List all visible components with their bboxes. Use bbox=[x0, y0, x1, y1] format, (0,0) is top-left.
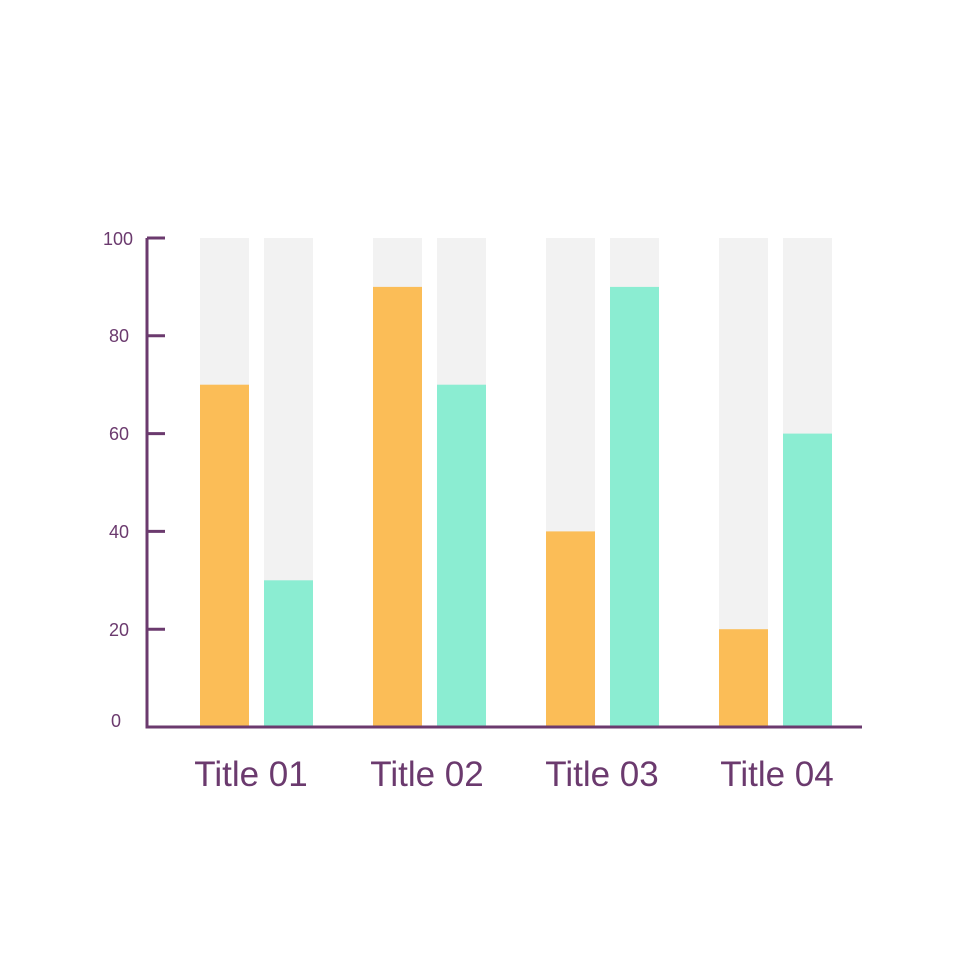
teal bars bbox=[264, 287, 832, 727]
y-axis labels: 100 bbox=[103, 229, 133, 249]
orange bars bbox=[200, 287, 768, 727]
y-axis labels: 0 bbox=[111, 711, 121, 731]
x-axis labels bbox=[194, 755, 834, 794]
x-axis labels: Title 02 bbox=[370, 755, 484, 794]
y-axis labels: 40 bbox=[109, 522, 129, 542]
x-axis labels: Title 01 bbox=[194, 755, 308, 794]
y-axis labels: 20 bbox=[109, 620, 129, 640]
y-axis labels: 60 bbox=[109, 424, 129, 444]
x-axis labels: Title 04 bbox=[720, 755, 834, 794]
background bars bbox=[200, 238, 832, 727]
y-axis labels: 80 bbox=[109, 326, 129, 346]
x-axis labels: Title 03 bbox=[545, 755, 659, 794]
y-axis labels bbox=[103, 229, 133, 731]
axes bbox=[147, 238, 862, 727]
